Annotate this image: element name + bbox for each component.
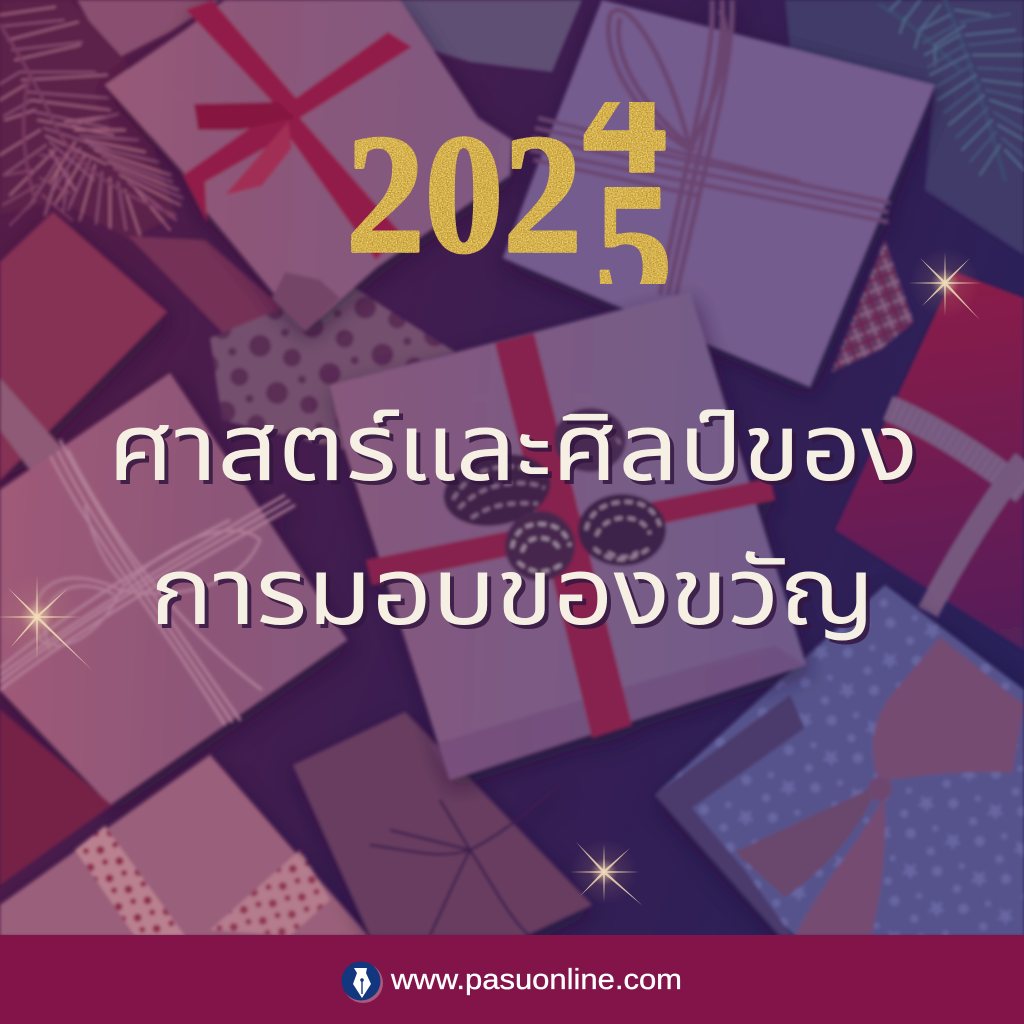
pine branch: upper left bbox=[0, 0, 182, 240]
gift box: lower left dark red bbox=[0, 710, 112, 885]
cone 3 bbox=[578, 494, 666, 566]
icon: pen nib logo bbox=[342, 962, 383, 1003]
gift box: top middle wrapped bbox=[360, 0, 582, 72]
gift box: bottom right star paper with bow bbox=[655, 585, 1024, 936]
gift box: patterned paper centre-left bbox=[210, 282, 455, 450]
clipped digit 4: 4 bbox=[583, 20, 667, 208]
pine branch: upper right bbox=[880, 0, 1024, 180]
gift box: bottom left with white paper bbox=[0, 755, 368, 936]
heading: Thai title bbox=[108, 395, 922, 648]
title: gold year 2024/5 bbox=[351, 102, 668, 284]
gift box: top-left with red ribbon bbox=[105, 0, 512, 331]
gift box: centre with red ribbon bbox=[330, 292, 806, 780]
cone 1 bbox=[437, 445, 557, 535]
gift box: left with light twine bbox=[0, 373, 347, 805]
gift box: brown lower centre bbox=[293, 712, 592, 936]
gift box: red wrapped right bbox=[835, 272, 1024, 650]
heading shadow line 2: การมอบของขวัญ bbox=[154, 543, 879, 648]
pine cones on centre box bbox=[437, 408, 666, 581]
sparkle: right bbox=[908, 247, 982, 320]
clipped digit 5: 5 bbox=[595, 149, 672, 337]
sparkle: left bbox=[0, 573, 92, 670]
gift box: top right behind bbox=[785, 0, 1024, 255]
year digits 202: 202 bbox=[346, 100, 582, 288]
heading shadow line 1: ศาสตร์และศิลป์ของ bbox=[112, 399, 922, 504]
gift box: plaid paper right bbox=[832, 240, 914, 372]
footer bar bbox=[0, 935, 1024, 1024]
gift box: dark red under top left box bbox=[128, 236, 310, 376]
website url: www.pasuonline.com bbox=[390, 964, 682, 996]
gift box: top far-left patterned paper bbox=[77, 0, 220, 58]
cone 4 bbox=[505, 511, 575, 581]
sparkle: bottom bbox=[570, 838, 643, 906]
twine bundle on left edge bbox=[0, 378, 62, 470]
heading line 1: ศาสตร์และศิลป์ของ bbox=[108, 395, 918, 500]
cone 2 bbox=[554, 408, 626, 472]
gift box: left red wrapped bbox=[0, 212, 167, 480]
gift box: top-right with twine bbox=[503, 0, 935, 387]
heading line 2: การมอบของขวัญ bbox=[150, 539, 875, 644]
